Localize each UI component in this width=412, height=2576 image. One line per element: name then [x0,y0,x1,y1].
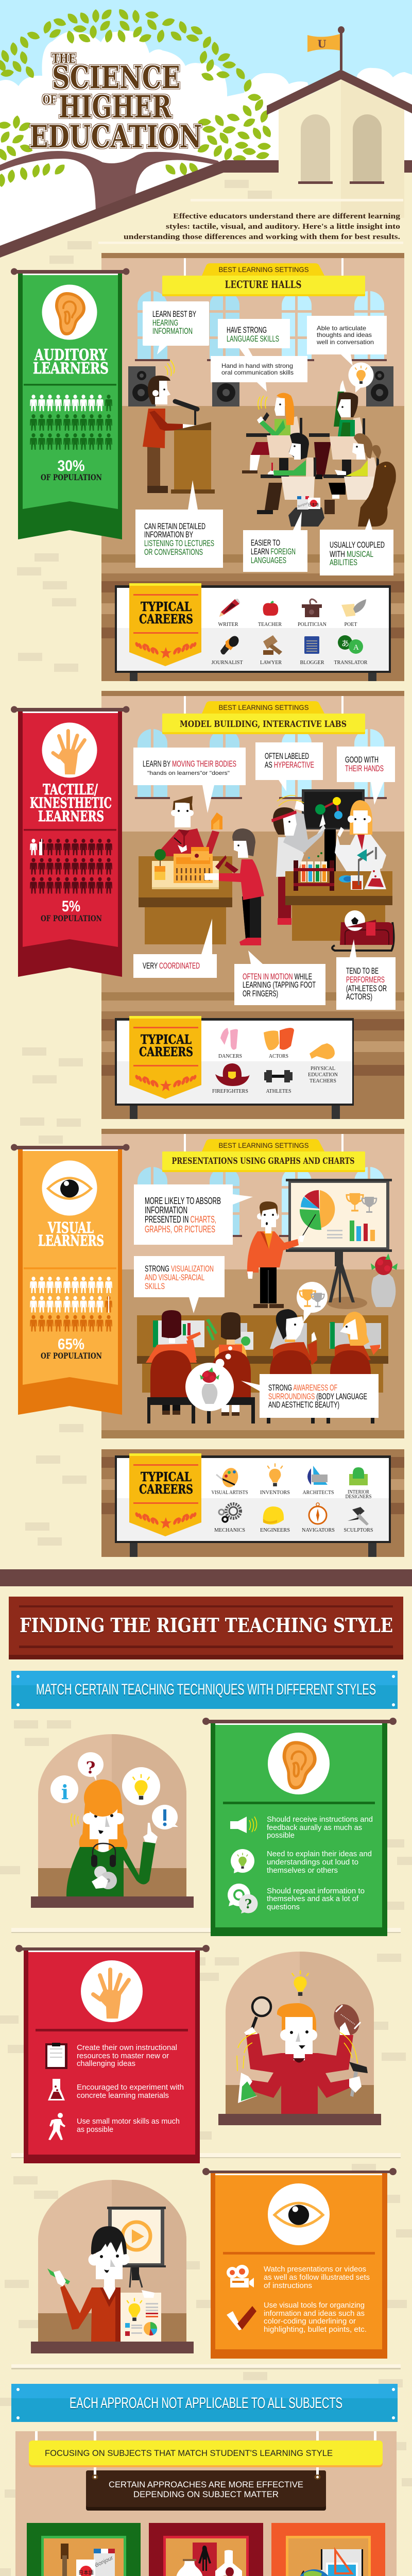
speech bubble: charts and graphs [134,1184,253,1245]
typical careers pennant: CAREERS [139,1482,193,1497]
speech bubble: foreign languages [243,512,307,572]
banner: auditory learners [11,268,130,539]
illustration: globe and drafting table [296,2549,363,2576]
tip: explain ideas: understandings out loud to [267,1858,358,1867]
speech bubble: retain information: OR CONVERSATIONS [144,547,203,557]
speech bubble: language skills [218,319,290,358]
speech bubble: language skills: LANGUAGE SKILLS [227,334,279,344]
sky [0,0,412,175]
icon: hand [81,1960,143,2022]
school tower [279,79,404,218]
icon: poet [341,599,366,628]
speakers [128,366,393,406]
icon: translator: A [353,643,359,652]
speech bubble: foreign languages: EASIER TO [251,538,280,548]
tip: visual tools: Use visual tools for organizing [264,2301,365,2310]
icon: inventors [260,1463,290,1496]
illustration: student building model [204,828,264,945]
sign: certain approaches: CERTAIN APPROACHES ARE MORE EFFECTIVE [109,2480,303,2489]
tip: create resources [45,2043,177,2069]
icon: politician [298,599,327,628]
tip: instructions aurally: possible [267,1831,295,1840]
sign: lecture halls: LECTURE HALLS [225,278,302,291]
illustration: model desk and teacher [139,796,232,944]
tip: repeat information [228,1884,365,1913]
icon: architects: ARCHITECTS [303,1489,334,1496]
sign: presentations: PRESENTATIONS USING GRAPHS AND CHARTS [172,1156,354,1166]
tip: repeat information: themselves and ask a lot of [267,1894,359,1903]
tip: visual tools [227,2301,367,2334]
stat: 5% [62,898,80,915]
icon: engineers [260,1506,290,1533]
icon: visual artists [211,1466,248,1496]
icon: journalist: JOURNALIST [211,659,243,666]
tip: watch presentations: as well as follow illustrated sets [264,2273,370,2282]
tip: create resources: resources to master new or [77,2052,169,2060]
speech bubble: hyperactive: OFTEN LABELED [265,751,309,761]
icon: inventors: INVENTORS [260,1489,290,1496]
speech bubble: musical abilities: ABILITIES [330,557,357,567]
speech bubble: performers [336,939,396,1010]
speech bubble: good with hands [337,747,395,805]
speech bubble: oral communication [211,356,307,392]
stat [41,898,102,923]
careers board: visual [115,1453,391,1557]
clouds [0,31,412,175]
speech bubble: visualization: STRONG VISUALIZATION [145,1264,214,1274]
stat: OF POPULATION [41,472,102,482]
illustration: flower vase [371,1253,398,1307]
speech bubble: coordinated: VERY COORDINATED [143,961,200,971]
speech bubble: moving bodies [133,748,246,813]
tip: explain ideas: Need to explain their ideas and [267,1850,372,1858]
tip: explain ideas: themselves or others [267,1866,338,1875]
panel: auditory learners room [101,253,404,681]
door: kinesthetic [149,2523,263,2576]
icon: blogger: BLOGGER [300,659,324,666]
typical careers pennant: TYPICAL [141,1469,192,1484]
icon: dancers [218,1028,242,1059]
tip: motor skills [48,2113,180,2140]
illustration: tactile student in arched window [218,1952,381,2125]
illustration: guitar, books, microphone: 日本語 [78,2569,94,2576]
flag [307,26,345,70]
icon: ear [42,284,97,340]
label: TACTILE/ [43,781,98,798]
projector screen [107,2207,166,2287]
sign: focusing on subjects: FOCUSING ON SUBJECTS THAT MATCH STUDENT'S LEARNING STYLE [45,2448,333,2458]
icon: dancers: DANCERS [218,1053,242,1059]
icon: magnifier [244,1997,271,2035]
icon: firefighters [212,1063,250,1094]
speech bubble: awareness: SURROUNDINGS (BODY LANGUAGE [268,1392,367,1401]
bubbles [50,1752,178,1829]
panel: tactile learners room [101,691,404,1119]
typical careers pennant: TYPICAL [141,1032,192,1047]
illustration: blackboard [302,789,365,873]
panel: auditory teaching tips [202,1718,397,1936]
windows [135,291,387,361]
speech bubble: hyperactive [255,742,323,791]
icon: mechanics: MECHANICS [214,1527,245,1533]
sign: focusing on subjects [29,2441,383,2467]
illustration: anatomy and sculpture [166,2543,242,2576]
speech bubble: hearing information: INFORMATION [152,326,193,336]
icon: navigators: NAVIGATORS [302,1527,335,1533]
careers board: auditory [115,583,391,681]
panel: doors room [15,2431,397,2576]
stat: OF POPULATION [41,1351,102,1361]
panel: visual teaching tips [202,2168,397,2359]
careers board: tactile [115,1016,354,1119]
illustration: presenter [247,1201,316,1308]
tip: watch presentations: Watch presentations or videos [264,2265,366,2274]
tip: motor skills: as possible [77,2125,113,2134]
title [29,51,202,155]
icon: poet: POET [344,621,357,628]
windows [135,729,387,799]
flag: U [317,38,327,50]
tip: experiment: Encouraged to experiment with [77,2083,184,2092]
tip: repeat information: questions [267,1903,300,1911]
ledge lines [11,1928,401,2369]
speech bubble: hyperactive: AS HYPERACTIVE [265,760,314,770]
icon: sculptors [344,1507,373,1533]
icon: firefighters: FIREFIGHTERS [212,1088,248,1094]
intro text: understanding those differences and working with them for best results. [124,233,400,241]
icon: hammer [349,2062,368,2097]
icon: flask [238,2073,258,2103]
speech bubble: charts and graphs: INFORMATION [145,1205,187,1215]
typical careers pennant: TYPICAL [141,599,192,614]
intro text [124,212,401,241]
tip: instructions aurally: Should receive instructions and [267,1815,373,1824]
speech bubble: often in motion: OFTEN IN MOTION WHILE [243,972,312,981]
title: THE [52,51,76,66]
icon: mechanics [214,1504,245,1533]
tip: repeat information: Should repeat information to [267,1887,365,1895]
sign: model building: BEST LEARNING SETTINGS [218,703,309,711]
icon: writer: WRITER [218,621,238,628]
speech bubble: coordinated [133,919,217,978]
speech bubble: articulate: Able to articulate [317,325,366,332]
tip: instructions aurally: feedback aurally as much as [267,1823,362,1832]
speech bubble: moving bodies: LEARN BY MOVING THEIR BODIES [143,759,236,769]
pictogram: 30 percent [30,395,112,450]
icon: engineers: ENGINEERS [260,1527,290,1533]
title: SCIENCE [52,60,180,96]
speech bubble: moving bodies: "hands on learners"or "doers" [147,770,230,776]
speech bubble: oral communication: oral communication skills [221,369,294,376]
illustration: teacher at podium [143,360,215,494]
icon: physical education teachers: TEACHERS [310,1078,336,1084]
thought bubble: flower vase [185,1346,234,1411]
speech bubble: charts and graphs: PRESENTED IN CHARTS, [145,1214,216,1225]
illustration: students in lecture hall: 日本語 [308,502,319,507]
door: visual [271,2523,385,2576]
icon: hand [42,722,97,778]
speech bubble: retain information: CAN RETAIN DETAILED [144,521,205,531]
panel: tactile teaching tips [15,1945,210,2163]
speech bubble: often in motion: LEARNING (TAPPING FOOT [243,980,316,990]
speech bubble: articulate: well in conversation [316,338,374,346]
speech bubble: oral communication: Hand in hand with strong [221,362,293,369]
speech bubble: charts and graphs: MORE LIKELY TO ABSORB [145,1196,221,1206]
icon: translator: TRANSLATOR [334,659,368,666]
pictogram: 5 percent [30,839,112,893]
tip: repeat information: ? [245,1896,252,1911]
icon: interior designers: INTERIOR [348,1489,370,1495]
speech bubble: musical abilities [320,518,393,575]
title: HIGHER [59,89,172,125]
icon: actors [264,1028,294,1059]
stat: 30% [58,457,84,474]
sign: presentations [162,1134,365,1172]
thought bubble: trophies [297,1282,328,1323]
speech bubble: musical abilities: USUALLY COUPLED [330,540,385,550]
icon: translator: あ [341,639,349,648]
icon: eye [268,2183,330,2245]
label: KINESTHETIC [30,794,112,811]
icon: navigators [302,1503,335,1533]
tip: experiment [48,2079,184,2100]
illustration: students in lecture hall: Bonjour [298,502,308,509]
stat: 65% [58,1336,84,1353]
icon: thought bulb [348,363,374,393]
label [30,781,112,825]
illustration: visual student in arched window [31,2180,194,2353]
illustration: gym bag [332,910,394,951]
illustration: guitar, books, microphone [51,2544,115,2576]
icon: physical education teachers: EDUCATION [308,1072,338,1078]
label: LEARNERS [38,1232,104,1249]
illustration: guitar, books, microphone: Bonjour [94,2555,114,2569]
illustration: projector screen with charts [286,1179,392,1309]
icon: athletes: ATHLETES [266,1088,291,1094]
speech bubble: visualization [134,1256,225,1313]
illustration: auditory student in arched window [31,1734,194,1908]
illustration: students at lab table [271,795,392,941]
sign: certain approaches: DEPENDING ON SUBJECT MATTER [133,2489,279,2499]
tip: instructions aurally [230,1815,373,1840]
label [33,346,109,378]
speech bubble: awareness: STRONG AWARENESS OF [268,1383,337,1393]
intro text: Effective educators understand there are different learning [173,212,401,221]
stat: OF POPULATION [41,913,102,923]
typical careers pennant [129,1016,201,1099]
icon: visual artists: VISUAL ARTISTS [211,1489,248,1496]
banner: tactile learners [11,706,130,977]
label [38,1219,104,1249]
speech bubble: language skills: HAVE STRONG [227,325,267,335]
icon: lawyer [260,635,282,666]
tip: visual tools: color-coding underlining or [264,2317,356,2326]
speech bubble: visualization: AND VISUAL-SPACIAL [145,1273,204,1282]
tree trunk [0,151,221,216]
sign: lecture halls [162,258,365,296]
stat [41,1336,102,1361]
speech bubble: hearing information [143,301,209,354]
heading: finding the right teaching style [9,1597,403,1659]
icon: interior designers: DESIGNERS [345,1494,372,1500]
icon: physical education teachers [308,1043,338,1084]
speech bubble: retain information [135,480,223,568]
roof [267,70,412,115]
icon: athletes [264,1070,293,1094]
icon: journalist [211,634,243,666]
icon: interior designers [345,1467,372,1500]
tip: watch presentations [227,2265,370,2290]
sign: model building [162,696,365,734]
typical careers pennant: CAREERS [139,612,193,626]
speech bubble: hearing information: HEARING [152,318,178,328]
speech bubble: often in motion: OR FINGERS) [243,989,278,998]
sign: presentations: BEST LEARNING SETTINGS [218,1141,309,1149]
tip: explain ideas [231,1849,372,1875]
sign: model building: MODEL BUILDING, INTERACTIVE LABS [180,719,347,730]
tip: experiment: concrete learning materials [77,2091,169,2100]
title: EDUCATION [29,119,202,155]
speech bubble: foreign languages: LEARN FOREIGN [251,547,296,556]
intro text: styles: tactile, visual, and auditory. Here's a little insight into [166,223,400,231]
icon: bulb [291,1971,309,1996]
speech bubble: good with hands: THEIR HANDS [345,764,384,773]
icon: marker [47,2268,70,2286]
tip: motor skills: Use small motor skills as much [77,2117,180,2126]
speech bubble: performers: ACTORS) [346,992,372,1002]
tip: create resources: Create their own instructional [77,2043,177,2052]
label: VISUAL [47,1219,94,1236]
icon: sculptors: SCULPTORS [344,1527,373,1533]
roof beam [0,160,279,258]
icon: ear [268,1733,330,1794]
speech bubble: awareness: AND AESTHETIC BEAUTY) [268,1400,339,1410]
speech bubble: good with hands: GOOD WITH [345,755,379,765]
typical careers pennant [129,583,201,666]
label: AUDITORY [34,346,107,364]
speech bubble: hearing information: LEARN BEST BY [152,309,196,319]
tree leaves [0,7,273,187]
label: LEARNERS [33,360,109,378]
icon: football [329,2000,364,2039]
speech bubble: awareness [241,1374,379,1418]
windows [135,1167,387,1237]
sign: certain approaches [86,2467,326,2511]
illustration: students in lecture hall [242,380,396,527]
speech bubble: articulate [307,316,387,366]
typical careers pennant [129,1453,201,1536]
tip: watch presentations: of instructions [264,2281,312,2290]
section divider beam [0,1569,412,1586]
tip: visual tools: information and ideas such as [264,2309,365,2318]
icon: writer [218,599,240,628]
icon: teacher: TEACHER [258,621,282,628]
panel: visual learners room [101,1129,404,1557]
stat [41,457,102,482]
banner: visual learners [11,1144,130,1415]
icon: politician: POLITICIAN [298,621,327,628]
illustration: seated students [137,1309,388,1423]
bubbles: i [61,1781,68,1804]
speech bubble: musical abilities: WITH MUSICAL [330,549,373,559]
speech bubble: performers: PERFORMERS [346,975,385,985]
icon: actors: ACTORS [269,1053,288,1059]
bubbles: ? [86,1758,95,1777]
typical careers pennant: CAREERS [139,1044,193,1059]
speech bubble: performers: TEND TO BE [346,966,379,976]
label: LEARNERS [38,808,104,825]
icon: physical education teachers: PHYSICAL [311,1065,335,1072]
title: OF [43,93,56,107]
speech bubble: retain information: INFORMATION BY [144,530,193,539]
chart paper [121,2290,161,2342]
speech bubble: visualization: SKILLS [145,1281,165,1291]
icon: translator [334,635,368,666]
heading: each approach [11,2384,398,2422]
speech bubble: foreign languages: LANGUAGES [251,555,286,565]
speech bubble: charts and graphs: GRAPHS, OR PICTURES [145,1224,215,1234]
speech bubble: articulate: thoughts and ideas [317,331,372,338]
building lower wall [0,173,412,392]
tip: visual tools: highlighting, bullet points, etc. [264,2325,367,2334]
tip: create resources: challenging ideas [77,2059,135,2068]
icon: architects [303,1466,334,1496]
icon: teacher [258,601,282,628]
speech bubble: performers: (ATHLETES OR [346,984,387,993]
sign: lecture halls: BEST LEARNING SETTINGS [218,265,309,274]
icon: eye [42,1160,97,1216]
heading: match techniques [11,1671,398,1709]
icon: lawyer: LAWYER [260,659,282,666]
speech bubble: often in motion [234,951,325,1005]
door: auditory [27,2523,141,2576]
speech bubble: retain information: LISTENING TO LECTURES [144,538,214,548]
icon: blogger [300,636,324,666]
pictogram: 65 percent [30,1277,112,1331]
